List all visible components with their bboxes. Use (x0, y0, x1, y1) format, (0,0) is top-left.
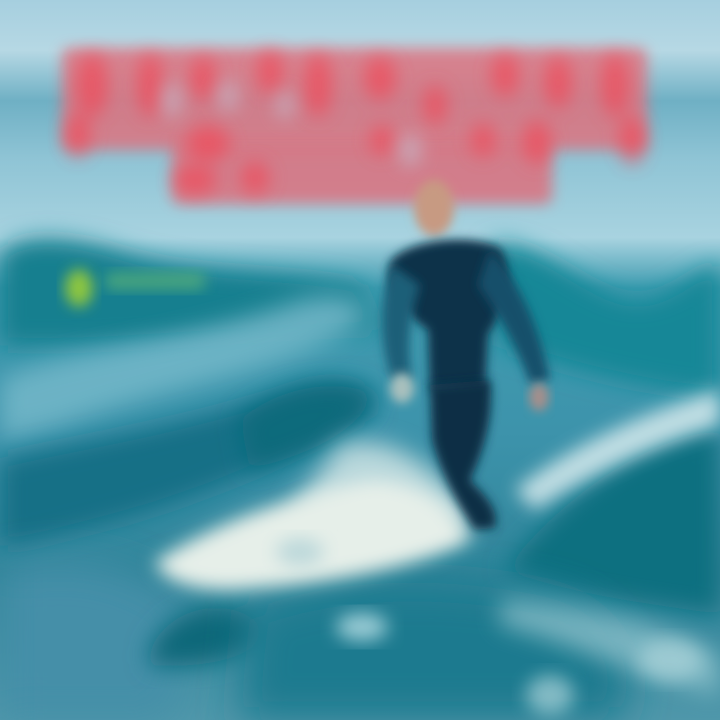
surfboard and foam (155, 442, 480, 590)
left arm (382, 265, 420, 380)
back wave right (490, 244, 720, 395)
lower sea (0, 562, 190, 720)
green logo mark and label (65, 269, 205, 307)
head (414, 180, 454, 236)
foam crest (515, 390, 720, 510)
legs (430, 380, 496, 530)
wetsuit torso (389, 240, 507, 390)
pale streak across the mid sea (0, 296, 366, 440)
hands (390, 373, 414, 403)
right arm (478, 250, 550, 384)
dark swell left (0, 382, 373, 546)
title: illegible blurred red lettering (62, 48, 647, 204)
waves (0, 239, 720, 720)
right dark swell (505, 430, 720, 615)
back wave left (0, 239, 380, 346)
surfer (382, 180, 550, 530)
